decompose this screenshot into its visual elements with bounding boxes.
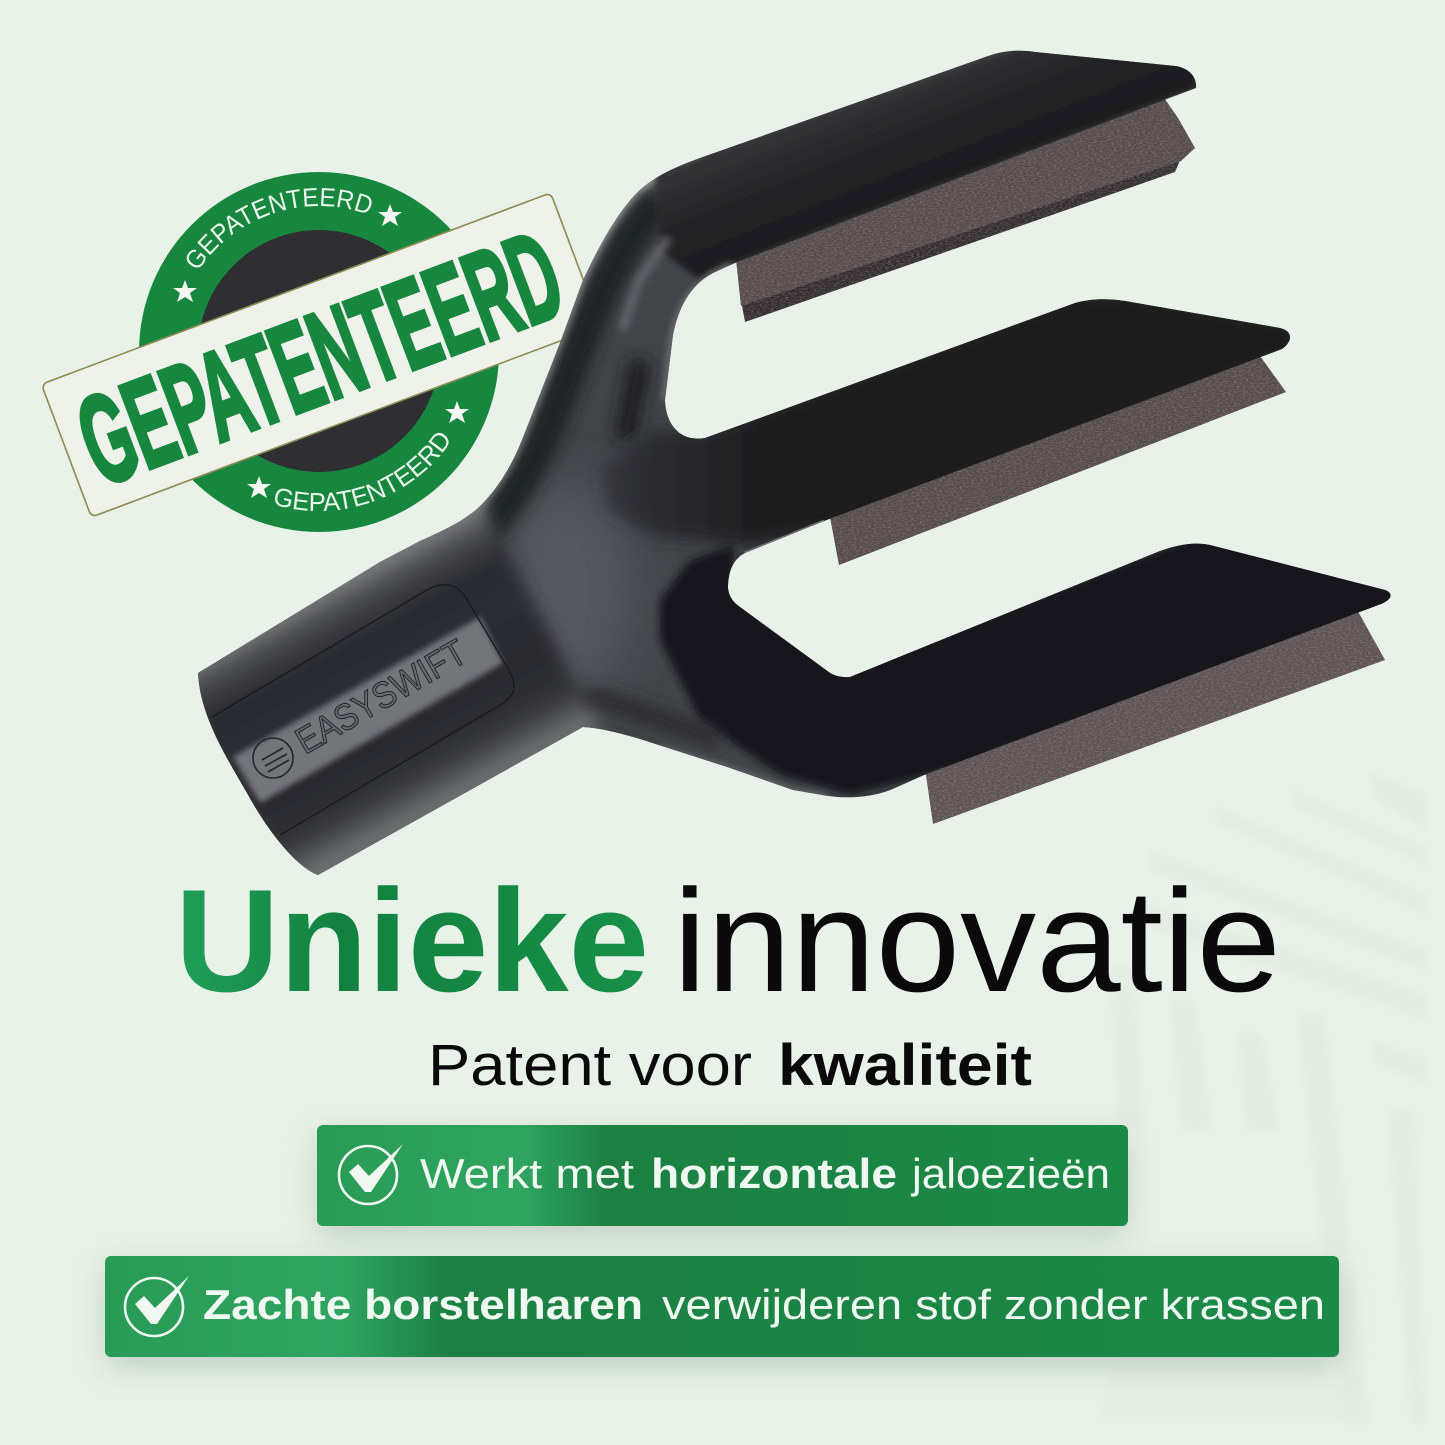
lower prong dark region [660, 530, 1400, 795]
subtitle: Patent voor [428, 1033, 752, 1098]
callout text: Zachte borstelharen [203, 1281, 643, 1328]
product: three-prong brush tool [150, 40, 1400, 900]
neck gray streak [622, 238, 668, 330]
brush pad bottom [925, 606, 1385, 824]
callout text: jaloezieën [910, 1150, 1110, 1197]
subtitle: kwaliteit [778, 1033, 1032, 1098]
slot bevel [665, 266, 732, 400]
title [175, 859, 1281, 1022]
callout: soft bristles [105, 1256, 1339, 1357]
star bottom left [247, 476, 271, 498]
background stripe pattern [1100, 773, 1427, 1423]
lower shadow band [560, 698, 720, 740]
star bottom right [445, 401, 469, 423]
subtitle [428, 1033, 1032, 1098]
title word black: innovatie [673, 859, 1281, 1022]
brush pad middle [829, 345, 1286, 565]
ring text top: GEPATENTEERD [186, 188, 372, 268]
callout: horizontal blinds [317, 1125, 1128, 1226]
top tip sliver [1165, 88, 1196, 100]
dark band following upper edge [474, 182, 660, 543]
brand text: EASYSWIFT [288, 631, 474, 762]
callout text [420, 1150, 1110, 1197]
callout text: Werkt met [420, 1150, 634, 1197]
middle prong dark region [603, 290, 1300, 545]
body light mottled zone [509, 480, 639, 686]
title word green: Unieke [175, 859, 649, 1022]
panel: patent stamp [42, 172, 584, 532]
callout text [203, 1281, 1325, 1328]
slot 2 edge highlight [745, 521, 824, 553]
top prong shading [655, 40, 1200, 280]
icon: check circle [339, 1144, 403, 1204]
lower rim highlight [660, 747, 828, 796]
star top left [173, 280, 197, 302]
cylinder section [198, 501, 602, 875]
callout text: horizontale [651, 1150, 897, 1197]
cylinder gray strip [233, 617, 503, 803]
patent banner [41, 193, 601, 519]
dark collar left of slot [625, 360, 640, 440]
tool body silhouette [198, 51, 1391, 875]
dark inner disc [198, 230, 440, 472]
star top right [378, 204, 402, 226]
banner text: GEPATENTEERD [60, 204, 580, 512]
green ring [139, 172, 499, 532]
ring text bottom: GEPATENTEERD [275, 432, 448, 512]
cylinder label plate outline [212, 585, 514, 835]
brush pad top [735, 92, 1195, 322]
pill shadows [105, 1135, 1339, 1367]
icon: check circle [125, 1276, 189, 1336]
pale rim along upper edge [420, 158, 700, 541]
callout text: verwijderen stof zonder krassen [662, 1281, 1325, 1328]
logo emblem [253, 738, 293, 778]
